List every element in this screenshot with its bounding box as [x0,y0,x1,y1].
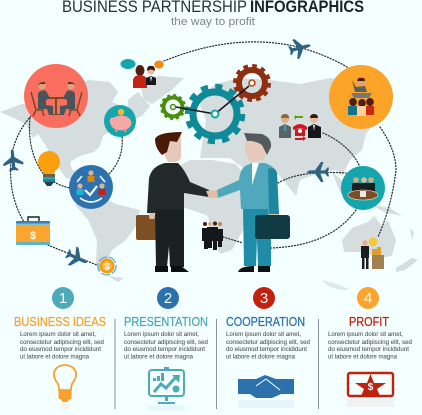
body text [124,331,208,360]
hand [149,213,155,219]
icon: plane right [307,162,329,182]
icon: star banknote: $ [368,382,374,393]
dotted route lines [11,42,396,265]
heading: COOPERATION [226,315,305,329]
icon: crowd of businessmen [202,222,223,250]
jacket [217,163,279,215]
hair [244,133,271,155]
number badge 1: 1 [59,290,67,307]
trousers [155,208,184,267]
icon: teamwork blue circle [69,165,113,209]
icon: bulb outline [54,365,76,409]
world map [0,76,418,290]
body text: Lorem ipsum dolor sit amet, [20,331,96,338]
right businessman [206,133,290,272]
jacket shade [268,168,279,215]
body text: ut labore et dolore magna [20,354,90,360]
shoes [238,266,270,272]
icon: chart monitor [148,367,185,411]
shirt [252,163,259,185]
divider [114,319,116,409]
body text: ut labore et dolore magna [328,354,398,360]
subtitle: the way to profit [171,16,255,28]
body text: ut labore et dolore magna [226,354,296,360]
icon: investor with coins [361,238,384,269]
panel: round table circle [341,166,385,210]
right person [60,82,82,116]
jacket [147,163,209,213]
icon: brown gear [236,66,268,100]
icon: plane top [287,35,313,61]
icon: phone call between two people [279,114,321,141]
icon: coin [98,257,116,275]
shoes [155,266,189,272]
icon: light bulb [38,151,60,186]
body text: consectetur adipiscing elit, sed [328,339,412,346]
left person [31,82,53,116]
briefcase [136,215,158,240]
icon: handshake [238,375,294,408]
body text [226,331,310,360]
body text: consectetur adipiscing elit, sed [124,339,208,346]
neck and face [160,134,181,162]
divider [318,319,319,409]
icon: money briefcase: $ [30,230,36,242]
icon: coin: $ [104,262,110,272]
number badge 4: 4 [364,290,372,307]
step 4: profit [328,287,412,407]
icon: plane bottom left [63,244,91,272]
heading: PROFIT [349,315,389,329]
step 2: presentation [124,287,208,411]
briefcase [255,215,290,239]
number badge 2: 2 [164,290,172,307]
heading: BUSINESS IDEAS [14,315,106,329]
body text: do eiusmod tempor incididunt [124,346,205,353]
panel: speaker circle [329,65,393,129]
body text [20,331,104,360]
body text: Lorem ipsum dolor sit amet, [226,331,301,338]
body text: do eiusmod tempor incididunt [328,346,409,353]
icon: people talking [120,59,164,88]
icon: money briefcase [16,217,50,245]
divider [216,319,217,409]
body text: do eiusmod tempor incididunt [226,346,307,353]
number badge 3: 3 [260,290,268,307]
hair [155,132,182,155]
trousers [243,208,271,266]
body text: Lorem ipsum dolor sit amet, [328,331,403,338]
body text: ut labore et dolore magna [124,354,194,360]
icon: big teal gear [176,86,249,141]
icon: piggy bank circle [104,105,136,137]
table [47,97,65,115]
body text: consectetur adipiscing elit, sed [226,339,310,346]
neck and face [245,139,266,162]
title [62,0,364,16]
panel: meeting circle [24,64,88,128]
body text: consectetur adipiscing elit, sed [20,339,104,346]
icon: plane left [2,148,24,172]
hand [206,190,218,198]
step 3: cooperation [226,287,310,408]
body text: Lorem ipsum dolor sit amet, [124,331,199,338]
heading: PRESENTATION [124,315,208,329]
icon: green gear [162,96,184,118]
left businessman [136,132,209,272]
body text [328,331,412,360]
body text: do eiusmod tempor incididunt [20,346,101,353]
step 1: business ideas [14,287,106,409]
